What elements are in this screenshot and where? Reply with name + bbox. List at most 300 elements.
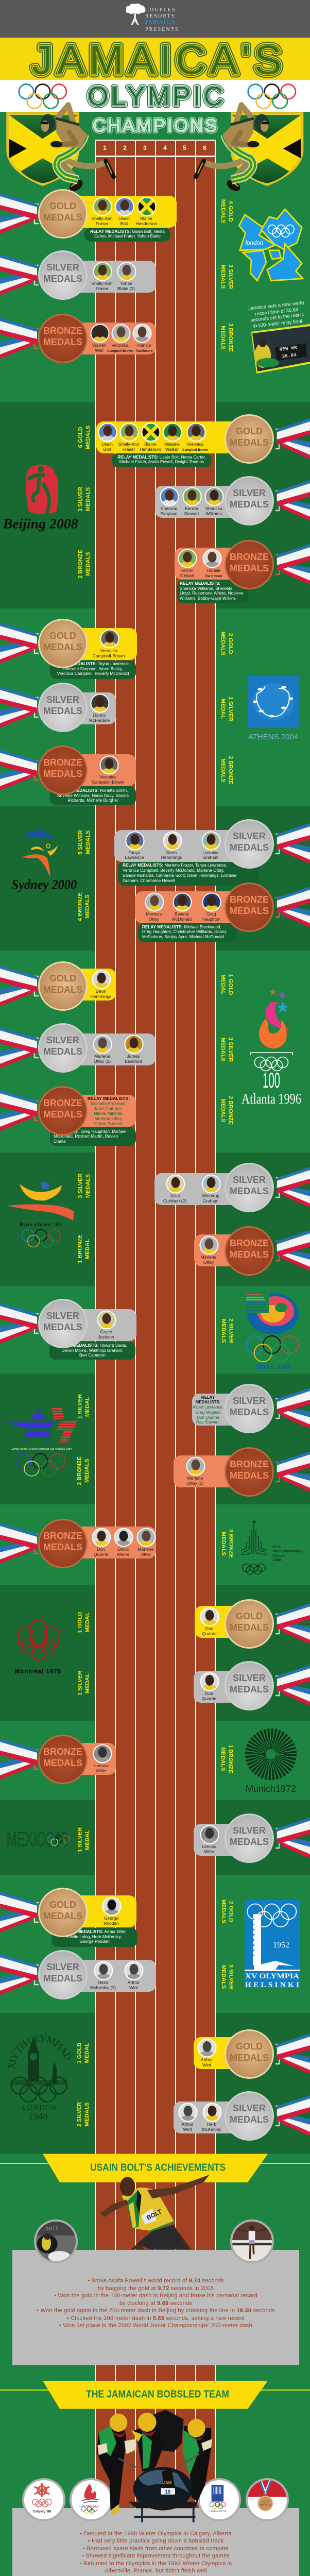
label: 2004 bronze count (220, 756, 234, 785)
pill: 2012 silver medalists (63, 261, 156, 293)
pill: 2004 bronze medalists: Veronica (99, 774, 117, 779)
relay: 2004 bronze: Novlene Williams, Nadia Davy. Sandie (57, 793, 129, 798)
medal: 1996 gold (0, 961, 88, 1011)
pill: 1948 gold medalists: Arthur (201, 2057, 213, 2062)
text: bobsled facts list: • Borrowed spare sleds from other countries to compete (83, 2546, 229, 2552)
pill: 2008 gold medalists: Blaine (144, 442, 157, 447)
pill: 1948 silver medalists: Arthur (181, 2122, 194, 2127)
icon: Lillehammer 94 (198, 2478, 241, 2521)
label: 1996 gold count (220, 974, 234, 995)
relay: 2008 bronze (177, 580, 248, 603)
label: 1996 silver count: 3 SILVER (228, 1037, 234, 1062)
figure: bobsled team pushing sled: JAM (163, 2481, 171, 2485)
logo: Moscow 1980: XXII Олимпиады (272, 1549, 304, 1553)
medal: 2008 silver: MEDALS (230, 499, 269, 509)
relay: 1996 bronze extra names: Clarke (54, 1139, 66, 1144)
pill: 1976 gold medalists: Quarrie (202, 1631, 217, 1636)
pill: 2012 silver medalists: Blake (2) (117, 286, 135, 291)
pill: 2008 silver medalists (155, 486, 250, 518)
running track with lanes: 1 (103, 144, 107, 151)
photo: relay team with scoreboard: 36.84 (282, 352, 297, 360)
logo: Couples Resorts Jamaica presents: PRESENTS (145, 27, 179, 32)
text: bobsled facts list (12, 2530, 299, 2576)
photo: Bolt by scoreboard (34, 2219, 78, 2263)
pill: 1992 silver medalists: Graham (203, 1198, 218, 1204)
relay: 2008 bronze: Williams, Bobby-Gaye Wilkins (180, 596, 236, 601)
pill: 1980 bronze medalists: David (117, 1547, 129, 1552)
pill: 1988 silver medalists: Grace (100, 1329, 112, 1334)
medal: 1948 gold (220, 2026, 310, 2082)
label: 1968 silver count (76, 1827, 92, 1852)
label: 1948 silver count: 2 SILVER (76, 2102, 82, 2127)
title: JAMAICA'S OLYMPIC CHAMPIONS: JAMAICA'S (32, 37, 282, 83)
pill: 1952 gold medalists: George (104, 1916, 118, 1921)
label: 1996 gold count: 1 GOLD (228, 974, 234, 995)
pill: 1980 bronze medalists: Weller (117, 1552, 129, 1557)
pill: 1996 bronze relay medalists: Juliet Cuthbert, (94, 1106, 124, 1111)
label: 1952 silver count (219, 1964, 235, 1989)
photo: relay team with scoreboard (251, 324, 310, 374)
pill: 2008 silver medalists: Stewart (184, 511, 199, 516)
label: 2000 silver count: 5 SILVER (77, 830, 83, 855)
medal: 1996 silver: SILVER (46, 1035, 79, 1045)
pill: 1996 bronze relay medalists: Michelle Freeman, (91, 1101, 127, 1106)
pill: 2008 gold medalists: Shelly-Ann (118, 442, 140, 447)
pill: 1992 silver medalists: Winthrop (202, 1193, 219, 1198)
pill: 1988 silver medalists: Jackson (98, 1334, 114, 1340)
pill: 1992 bronze medalists: Merlene (201, 1255, 216, 1260)
pill: 1992 bronze medalists (194, 1234, 250, 1266)
medal: 2004 silver: SILVER (46, 694, 79, 705)
label: 2008 bronze count: MEDALS (85, 552, 91, 576)
medal: 1984 silver: SILVER (233, 1395, 266, 1405)
pill: 2012 gold medalists: Usain (118, 216, 130, 221)
medal: 1984 bronze (220, 1444, 310, 1500)
pill: 2008 silver medalists: Sherone (161, 506, 177, 511)
title: JAMAICA'S OLYMPIC CHAMPIONS: CHAMPIONS (93, 115, 217, 136)
pill: 2000 silver medalists: Lawrence (125, 855, 144, 860)
pill: 1984 silver relay medalists: Ray Stewart, (196, 1420, 220, 1425)
pill: 2000 silver medalists: Deon (166, 850, 177, 855)
pill: 1972 bronze medalists: Lennox (94, 1763, 109, 1768)
pill: 2004 bronze medalists (63, 754, 136, 786)
pill: 2012 gold medalists: Bolt (120, 221, 128, 226)
relay: 2004 gold: RELAY MEDALISTS: Tayna Lawrence, (56, 662, 130, 666)
logo: Munich 1972 (242, 1728, 300, 1794)
pill: 2008 gold medalists: Fraser (123, 447, 135, 452)
pill: 2000 bronze medalists: Merlene (146, 911, 162, 917)
medal: 1988 silver: SILVER (46, 1311, 79, 1321)
title: JAMAICA'S OLYMPIC CHAMPIONS: JAMAICA'S (32, 37, 282, 83)
pill: 1984 bronze medalists: Ottey (2) (186, 1481, 204, 1486)
logo: Los Angeles 1984 (3, 1405, 80, 1478)
medal: 2012 silver: SILVER (46, 262, 79, 273)
logo: Atlanta 1996: 100 (263, 1068, 280, 1092)
title: JAMAICA'S OLYMPIC CHAMPIONS: OLYMPIC (88, 81, 223, 111)
flag shields and sprinters (6, 102, 304, 191)
relay: 2008 gold: Michael Frater, Asafa Powell, Dwight Thomas (119, 460, 204, 464)
label: 1992 bronze count: 1 BRONZE (77, 1234, 83, 1263)
medal: 1976 silver: SILVER (233, 1672, 266, 1683)
pill: 2012 gold medalists: Blaine (140, 216, 152, 221)
pill: 2004 gold medalists (63, 628, 137, 660)
label: 1984 bronze count: 2 BRONZE (76, 1456, 82, 1485)
pill: 1980 bronze medalists: Don (97, 1547, 105, 1552)
text: Bolt achievement list: • Won the gold in the 100-meter dash in Beijing and broke his personal record (54, 2293, 257, 2299)
medal: 1996 bronze: BRONZE (43, 1098, 82, 1108)
medal: 2000 silver: SILVER (233, 831, 266, 841)
medal: 2012 gold: GOLD (49, 201, 76, 211)
logo: Beijing 2008: Beijing 2008 (3, 515, 78, 532)
pill: 1984 silver relay medalists (192, 1394, 249, 1426)
logo: Seoul 1988 (242, 1291, 302, 1372)
logo: London 1948: LONDON (22, 2104, 58, 2112)
medal: 1996 bronze: MEDALS (43, 1109, 82, 1120)
pill: 1972 bronze medalists: Miller (96, 1768, 107, 1773)
panel: Bolt achievements (12, 2250, 299, 2365)
pill: 1980 bronze medalists: Merlene (138, 1547, 153, 1552)
pill: 2012 silver medalists: Shelly-Ann (91, 281, 113, 286)
label: 1988 silver count: 2 SILVER (228, 1318, 234, 1343)
label: 2008 bronze count (77, 550, 91, 579)
photo: Bolt by scoreboard: bolt (45, 2226, 59, 2232)
logo: Montreal 1976 (5, 1618, 72, 1677)
label: 2008 silver count: 3 SILVER (77, 487, 83, 512)
pill: 2000 bronze medalists: McDonald (172, 917, 192, 922)
label: 1996 bronze count: 2 BRONZE (228, 1096, 234, 1125)
icon: Calgary 88 (22, 2478, 65, 2521)
medal: 1980 bronze (0, 1515, 90, 1572)
medal: 2004 gold (0, 619, 88, 668)
medal: 1948 silver: SILVER (233, 2103, 266, 2113)
logo: Barcelona 1992 (5, 1180, 77, 1249)
label: 2012 gold count: 4 GOLD (228, 201, 234, 222)
pill: 2012 bronze medalists: Warren (92, 343, 107, 348)
icon: gold medal world push: MEDALS (260, 2504, 271, 2507)
relay: 2012 gold: Carter, Michael Frater, Yohan Blake (94, 234, 161, 239)
medal: 2008 silver (225, 476, 310, 526)
medal: 2012 gold (0, 189, 88, 239)
medal: 1996 silver: MEDALS (43, 1046, 82, 1057)
pill: 1948 silver medalists (174, 2102, 250, 2133)
heading: Usain Bolt's achievements (0, 2151, 310, 2184)
medal: 2012 bronze: MEDALS (43, 337, 82, 347)
pill: 1952 silver medalists: Arthur (128, 1980, 140, 1985)
medal: 2004 gold: GOLD (49, 631, 76, 641)
medal: 2008 gold (225, 414, 310, 464)
medal: 1948 silver (220, 2088, 310, 2144)
pill: 2008 gold medalists: Veronica (186, 442, 204, 447)
logo: Sydney 2000 (12, 828, 77, 892)
logo: Seoul 1988: SEOUL 1988 (256, 1364, 291, 1370)
pill: 2012 bronze medalists: Hansle (137, 343, 151, 348)
pill: 1996 gold medalists: Hemmings (91, 994, 111, 999)
pill: 1996 silver medalists: James (127, 1054, 140, 1059)
label: 1984 silver count: MEDAL (84, 1396, 91, 1417)
pill: 1984 silver relay medalists: MEDALISTS: (196, 1400, 220, 1404)
medal: 2012 bronze: BRONZE (43, 326, 82, 336)
logo: Couples Resorts Jamaica presents: JAMAICA (145, 20, 176, 25)
relay: 2008 gold (112, 453, 212, 467)
medal: 1976 gold: MEDALS (230, 1622, 269, 1632)
label: 1976 gold count: 1 GOLD (77, 1612, 83, 1633)
label: 2008 gold count (77, 426, 91, 449)
title: JAMAICA'S OLYMPIC CHAMPIONS: OLYMPIC (88, 81, 223, 111)
pill: 1948 silver medalists: Herb (207, 2122, 216, 2127)
relay: 2000 silver: Graham, Charmaine Howell (123, 878, 175, 883)
logo: London 2012 (238, 208, 304, 282)
pill: 2008 gold medalists: Melaine (164, 442, 180, 447)
medal: 2012 silver (0, 250, 88, 300)
medal: 2012 bronze (0, 314, 88, 363)
label: 1984 bronze count: MEDALS (84, 1459, 90, 1483)
pill: 2012 bronze medalists (63, 323, 156, 354)
relay: 2000 silver: Veronica Campbell, Beverly McDonald, Marlene Ottey, (123, 868, 224, 873)
label: 1992 silver count (77, 1174, 92, 1198)
pill: 2008 bronze medalists: Stewart (180, 573, 194, 578)
pill: 1996 silver medalists (63, 1033, 156, 1065)
relay: 2008 gold: RELAY MEDALISTS: Usain Bolt, Nesta Carter, (117, 454, 206, 460)
pill: 1976 gold medalists (195, 1606, 250, 1638)
label: 1952 silver count: 3 SILVER (228, 1964, 234, 1989)
logo: Helsinki 1952 poster: 1952 (273, 1941, 289, 1950)
label: 1992 silver count: MEDALS (85, 1174, 91, 1198)
logo: Atlanta 1996 (242, 988, 301, 1107)
relay: 2000 bronze: RELAY MEDALISTS: Michael Blackwood, (142, 924, 221, 929)
medal: 1996 gold: MEDALS (43, 985, 82, 995)
medal: 2004 silver: MEDALS (43, 706, 82, 716)
pill: 2000 bronze medalists (135, 891, 250, 923)
medal: 1952 gold (0, 1884, 90, 1941)
pill: 2012 gold medalists (63, 196, 177, 228)
text: Bolt achievement list: • Won 1st place in the 2002 World Junior Championships' 200-meter dash (59, 2323, 252, 2329)
medal: 2008 bronze: MEDALS (230, 563, 269, 573)
medal: 1976 gold: GOLD (236, 1611, 263, 1621)
label: 1968 silver count: MEDAL (84, 1829, 91, 1850)
relay: 1988 silver: RELAY MEDALISTS: Howard Davis, (58, 1343, 127, 1348)
pill: 2000 silver medalists (114, 829, 250, 861)
title: JAMAICA'S OLYMPIC CHAMPIONS: JAMAICA'S (32, 37, 282, 83)
label: 1948 silver count: MEDALS (84, 2103, 90, 2126)
pill: 2008 bronze medalists: Hansle (207, 568, 220, 573)
medal: 1976 silver (220, 1657, 310, 1714)
label: 1984 silver count: 1 SILVER (77, 1394, 83, 1419)
running track with lanes: 6 (203, 144, 206, 151)
medal: 1952 silver: MEDALS (43, 1973, 82, 1984)
medal: 1984 silver (220, 1380, 310, 1436)
relay: 2008 bronze: RELAY MEDALISTS: (180, 581, 220, 586)
label: 1948 silver count (76, 2102, 91, 2127)
pill: 2012 silver medalists: Yohan (120, 281, 132, 286)
relay: 2012 gold (84, 228, 170, 242)
icon: Calgary 88: Calgary '88 (32, 2510, 51, 2513)
label: 1952 gold count: MEDALS (220, 1900, 227, 1923)
figure: Usain Bolt pose (97, 2175, 214, 2250)
heading: Jamaican bobsled team (0, 2379, 310, 2410)
label: 1984 silver count (76, 1394, 92, 1419)
label: 1948 gold count (76, 2043, 91, 2063)
figure: bobsled team pushing sled: 18 (165, 2489, 171, 2495)
label: 2012 silver count: 3 SILVER (228, 264, 234, 289)
label: 1996 silver count (220, 1037, 234, 1062)
relay: 2008 bronze: Shericka Williams, Shereefa (180, 586, 232, 591)
medal: 1988 silver: MEDALS (43, 1322, 82, 1332)
label: 2004 bronze count: 2 BRONZE (228, 756, 234, 785)
pill: 2000 bronze medalists: Ottey (149, 917, 159, 922)
text: bobsled facts list: Albertville, France, but didn't finish well (105, 2568, 207, 2574)
pill: 1996 gold medalists (63, 969, 116, 1001)
pill: 2008 gold medalists: Usain (101, 442, 113, 447)
pill: 1948 gold medalists: Wint (202, 2062, 211, 2067)
relay: 1996 bronze extra names: McDonald, Roxbert Martin, Davian (54, 1134, 118, 1139)
pill: 2008 gold medalists: Walker (165, 447, 179, 452)
medal: 1984 silver: MEDALS (230, 1406, 269, 1417)
label: 1980 bronze count: MEDALS (220, 1532, 227, 1555)
photo: Bolt at finish line (230, 2219, 274, 2263)
photo: relay team with scoreboard: NEW WR (279, 345, 298, 352)
medal: 1968 silver: MEDALS (230, 1837, 269, 1847)
medal: 1976 silver: MEDALS (230, 1684, 269, 1694)
relay: 2000 bronze: McFarlane, Sanjay Ayre, Michael McDonald (142, 935, 224, 939)
title: JAMAICA'S OLYMPIC CHAMPIONS: JAMAICA'S (32, 37, 282, 83)
label: 1992 silver count: 3 SILVER (77, 1174, 83, 1198)
pill: 1952 silver medalists (63, 1960, 156, 1992)
logo: Moscow 1980: Игры (272, 1544, 281, 1549)
pill: 2008 gold medalists: Bolt (104, 447, 111, 452)
relay: 1952 gold (51, 1928, 137, 1947)
title: JAMAICA'S OLYMPIC CHAMPIONS: CHAMPIONS (93, 115, 217, 136)
logo: Moscow 1980: Москва (272, 1553, 286, 1558)
label: 2008 bronze count: 2 BRONZE (77, 550, 83, 579)
medal: 1952 gold: GOLD (49, 1900, 76, 1910)
medal: 1992 bronze (220, 1223, 310, 1279)
logo: Los Angeles 1984: Games of the XXIIIrd Olympiad Los Angeles 1984 (10, 1448, 72, 1451)
medal: 2000 silver (225, 819, 310, 869)
text: bobsled facts list: • Showed significant improvement throughout the games (82, 2553, 230, 2559)
running track with lanes: 4 (163, 144, 167, 151)
pill: 1992 silver medalists (154, 1173, 249, 1205)
pill: 2008 silver medalists: Simpson (160, 511, 178, 516)
relay: 2000 silver: Sandie Richards, Catherine Scott, Deon Hemmings, Lorraine (123, 873, 236, 878)
relay: 1988 silver (49, 1342, 135, 1360)
pill: 2000 silver medalists: Lorraine (202, 850, 219, 855)
medal: 1968 silver: SILVER (233, 1825, 266, 1836)
pill: 1996 silver medalists: Merlene (94, 1054, 110, 1059)
label: 1996 silver count: MEDALS (220, 1038, 226, 1061)
caption: relay record: seconds set in the men's (250, 312, 304, 323)
label: 1968 silver count: 1 SILVER (77, 1827, 83, 1852)
pill: 1984 bronze medalists (174, 1455, 250, 1487)
relay: 2004 gold: Veroncia Campbell, Beverly McDonald (57, 671, 129, 676)
pill: 1952 silver medalists: Wint (129, 1985, 138, 1990)
text: Bolt achievement list (12, 2277, 299, 2330)
medal: 2000 bronze: BRONZE (230, 894, 269, 905)
pill: 1968 silver medalists: Miller (204, 1849, 214, 1854)
medal: 1952 silver (0, 1946, 90, 2003)
relay: 2004 bronze: Richards, Michelle Burgher (67, 798, 118, 803)
running track with lanes: 2 (123, 144, 127, 151)
medal: 1980 bronze: MEDALS (43, 1542, 82, 1552)
medal: 1976 gold (220, 1595, 310, 1652)
pill: 2008 gold medalists: Henderson (140, 447, 161, 452)
pill: 1976 gold medalists: Don (205, 1626, 213, 1631)
logo: Sydney 2000: Sydney 2000 (12, 876, 77, 892)
pill: 1952 gold medalists: Rhoden (104, 1921, 119, 1926)
relay: 2012 gold: RELAY MEDALISTS: Usain Bolt, Nesta (90, 229, 165, 234)
label: 1952 gold count (219, 1900, 235, 1923)
text: bobsled facts list: • Debuted at the 1988 Winter Olympics in Calgary, Alberta (80, 2531, 232, 2537)
label: 2004 gold count: MEDALS (220, 632, 226, 655)
pill: 1988 silver medalists (63, 1309, 136, 1341)
medal: 1980 bronze: BRONZE (43, 1531, 82, 1541)
pill: 2000 silver medalists: Hemmings (161, 855, 182, 860)
label: 2012 silver count: MEDALS (220, 265, 226, 289)
text: bobsled facts list: • Returned to the Olympics in the 1992 Winter Olympics in (80, 2561, 232, 2567)
caption: relay record: record time of 36.84 (255, 307, 299, 317)
medal: 1952 silver: SILVER (46, 1962, 79, 1972)
medal: 2000 bronze (225, 883, 310, 932)
medal: 1992 silver (220, 1159, 310, 1216)
medal: 2008 silver: SILVER (233, 487, 266, 498)
logo: Munich 1972: Munich1972 (246, 1784, 296, 1794)
label: 2008 gold count: 6 GOLD (77, 427, 83, 448)
relay: 2000 bronze (138, 923, 237, 942)
medal: 1948 silver: MEDALS (230, 2114, 269, 2125)
relay: 1952 gold: RELAY MEDALISTS: Arthur Wint, (62, 1929, 127, 1934)
pill: 1992 silver medalists: Cuthbert (2) (163, 1198, 186, 1204)
logo: Couples Resorts Jamaica presents (126, 3, 179, 32)
medal: 1992 silver: MEDALS (230, 1186, 269, 1196)
pill: 1996 bronze relay medalists: Nikole Mitchell, (94, 1111, 124, 1116)
pill: 2004 gold medalists: Campbell-Brown (93, 653, 125, 658)
label: 2012 gold count: MEDALS (220, 199, 226, 223)
olympic rings right (247, 83, 297, 109)
medal: 2004 gold: MEDALS (43, 642, 82, 652)
text: Bolt achievement list: • Clocked the 100-meter dash in 9.63 seconds, setting a new record (67, 2315, 245, 2321)
medal: 2008 gold: GOLD (236, 426, 263, 436)
caption: relay record: 4x100-meter relay final. (252, 318, 304, 329)
pill: 2000 bronze medalists: Beverly (175, 911, 189, 917)
heading: Usain Bolt's achievements: USAIN BOLT'S ACHIEVEMENTS (90, 2162, 226, 2173)
relay: 2000 bronze: Greg Haughton, Christopher Williams, Danny (142, 929, 227, 934)
pill: 2000 silver medalists: Tanya (129, 850, 140, 855)
pill: 2008 bronze medalists: Parchment (205, 574, 222, 578)
relay: 1988 silver: Bert Cameron (79, 1353, 106, 1358)
medal: 1972 bronze (0, 1731, 90, 1788)
pill: 2012 gold medalists: Fraser (96, 221, 108, 226)
label: 2000 bronze count: MEDALS (84, 895, 91, 919)
logo: Couples Resorts Jamaica presents: COUPLES (145, 7, 176, 13)
logo: Moscow 1980 (238, 1517, 310, 1577)
medal: 2004 silver (0, 683, 88, 732)
label: 1952 silver count: MEDALS (220, 1965, 227, 1989)
label: 2012 silver count (220, 264, 234, 289)
pill: 1996 bronze relay medalists (63, 1095, 136, 1127)
pill: 2000 silver medalists: Graham (203, 855, 218, 860)
pill: 1972 bronze medalists (63, 1743, 116, 1775)
relay: 1996 bronze extra names: Andrea Lloyd, Greg Haughton, Michael (54, 1129, 127, 1133)
text: Bolt achievement list: • Broke Asafa Powell's world record of 9.74 seconds (88, 2278, 224, 2284)
medal: 1952 gold: MEDALS (43, 1911, 82, 1921)
label: 1996 bronze count: MEDALS (220, 1098, 226, 1122)
pill: 1996 gold medalists: Deon (96, 989, 106, 994)
relay: 1952 gold: Leslie Laing, Herb McKenley, (67, 1935, 122, 1939)
medal: 1984 bronze: MEDALS (230, 1470, 269, 1481)
running track with lanes: 3 (143, 144, 147, 151)
label: 1976 silver count: MEDAL (84, 1673, 91, 1693)
label: 1988 silver count: MEDALS (220, 1319, 227, 1343)
label: 1972 bronze count: 1 BRONZE (228, 1744, 234, 1773)
